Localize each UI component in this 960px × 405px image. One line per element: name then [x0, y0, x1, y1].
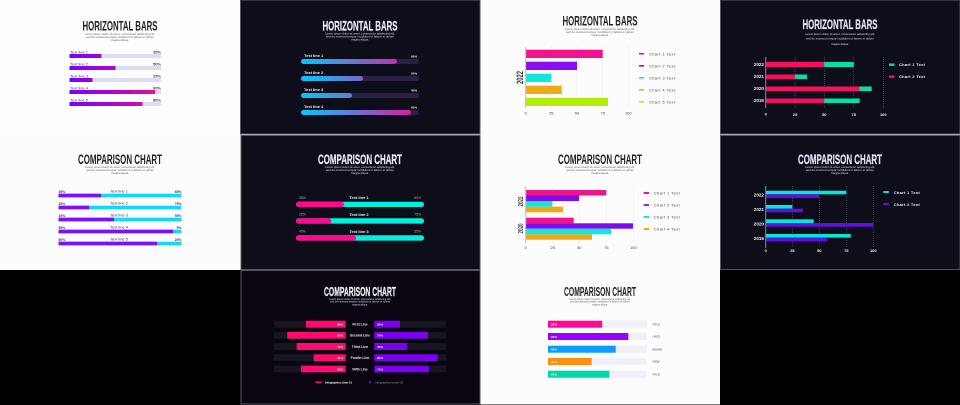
comparison row 1: 65% — [175, 190, 182, 194]
bar chart: 25 — [793, 112, 798, 117]
bar row 1 — [70, 50, 161, 58]
description: Lorem ipsum dolor sit amet, consectetur adipiscing elit, — [85, 33, 155, 36]
comparison row 4: Text line 4 — [110, 224, 129, 230]
bar row 5: 80% — [153, 98, 161, 102]
legend: Chart 1 Text — [654, 190, 681, 196]
progress row 4: VIEW — [652, 360, 660, 364]
comparison row 3: 45% — [299, 230, 306, 234]
bar row 5: Text line 5 — [70, 98, 89, 102]
comparison row 2 — [58, 200, 182, 209]
comparison row 2: 75% — [175, 202, 182, 206]
description: Lorem ipsum dolor sit amet, consectetur adipiscing elit, — [805, 33, 875, 36]
bar chart: 100 — [870, 248, 877, 253]
comparison row 3: 55% — [175, 214, 182, 218]
bar chart: 0 — [765, 112, 768, 116]
description: sed do eiusmod tempor incididunt ut labore et dolore — [86, 36, 155, 39]
description: Lorem ipsum dolor sit amet, consectetur adipiscing elit, — [565, 28, 635, 31]
progress row 5 — [548, 371, 660, 378]
progress row 3: 68% — [551, 348, 557, 352]
row 4: 45% — [337, 356, 343, 360]
bar chart: 50 — [575, 110, 580, 116]
legend: Chart 1 Text — [894, 190, 920, 195]
bar row 1 — [301, 53, 419, 64]
title: COMPARISON CHART — [318, 151, 402, 167]
title: COMPARISON CHART — [324, 285, 396, 299]
title: HORIZONTAL BARS — [802, 16, 878, 32]
progress row 2: LIKES — [652, 335, 660, 339]
bar chart: 2020 — [754, 86, 764, 91]
legend — [639, 52, 676, 104]
bar chart: 2020 — [518, 223, 525, 234]
progress row 3 — [548, 346, 662, 353]
comparison row 5 — [58, 236, 182, 245]
bar chart: 2022 — [518, 196, 525, 206]
comparison row 2: Text line 2 — [349, 212, 369, 217]
bar row 4: 90% — [153, 86, 161, 90]
title: HORIZONTAL BARS — [562, 13, 638, 29]
row 2: Second Line — [350, 334, 370, 338]
panel: stacked bars dark — [720, 0, 960, 134]
bar chart — [518, 186, 637, 250]
title: COMPARISON CHART — [558, 151, 642, 167]
bar chart — [754, 57, 887, 117]
row 2: 80% — [337, 334, 343, 338]
bar row 1: Text line 1 — [70, 50, 89, 54]
comparison row 2: Text line 2 — [110, 200, 129, 206]
description: Lorem ipsum dolor sit amet, consectetur adipiscing elit, — [805, 166, 875, 169]
comparison row 3: Text line 3 — [349, 229, 369, 234]
bar row 3: 45% — [411, 88, 417, 92]
row 2 — [274, 332, 446, 339]
title: HORIZONTAL BARS — [322, 18, 398, 34]
description: sed do eiusmod tempor incididunt ut labore et dolore — [570, 301, 631, 304]
description: magna aliqua. — [831, 172, 849, 175]
description — [325, 32, 395, 42]
description: magna aliqua. — [591, 172, 609, 175]
bar chart: 75 — [844, 248, 849, 253]
bar row 3 — [70, 74, 161, 82]
description: magna aliqua. — [351, 172, 369, 175]
legend: Chart 2 Text — [649, 64, 676, 68]
bar chart: 25 — [790, 248, 795, 253]
row 3: 70% — [337, 345, 343, 349]
comparison row 2: 25% — [58, 202, 65, 206]
panel: single-year bar chart light — [480, 0, 720, 135]
bar chart: 2022 — [754, 192, 764, 198]
bar row 2: 55% — [411, 72, 417, 76]
comparison row 3: 55% — [414, 230, 421, 234]
description — [565, 166, 635, 175]
bar row 3: 25% — [153, 74, 161, 78]
bar chart: 2019 — [754, 98, 764, 103]
panel: horizontal bars light — [0, 0, 240, 135]
progress row 5: TITLE — [652, 372, 660, 376]
panel: grouped bars dark — [720, 136, 960, 270]
comparison row 1: 35% — [58, 190, 65, 194]
panel: colored progress bars light — [480, 270, 720, 404]
bar chart: 50 — [822, 112, 827, 117]
description — [565, 28, 635, 37]
bar row 1: 80% — [411, 54, 417, 58]
bar chart: 75 — [600, 110, 606, 116]
bar chart: 2022 — [515, 71, 525, 84]
description: sed do eiusmod tempor incididunt ut labore et dolore — [330, 301, 391, 304]
bar chart: 0 — [525, 110, 528, 116]
description: Lorem ipsum dolor sit amet, consectetur adipiscing elit, — [85, 166, 155, 169]
row 1: First Line — [352, 322, 368, 326]
description — [329, 298, 391, 306]
title: COMPARISON CHART — [564, 285, 636, 299]
row 1: 35% — [377, 322, 383, 326]
description: magna aliqua. — [111, 172, 129, 175]
row 3: Third Line — [352, 345, 368, 349]
legend — [315, 380, 403, 384]
legend: Infographics chart 02 — [375, 380, 403, 384]
row 5 — [274, 366, 446, 372]
description — [325, 166, 395, 175]
row 2: 75% — [377, 334, 383, 338]
description: magna aliqua. — [111, 39, 129, 42]
panel: butterfly comparison dark — [241, 270, 480, 404]
bar chart: 2019 — [754, 236, 764, 241]
panel: grouped bar chart light — [480, 136, 720, 270]
comparison row 3: 45% — [58, 214, 65, 218]
bar chart: 25 — [550, 245, 556, 250]
description — [85, 166, 155, 175]
row 4 — [274, 354, 446, 361]
bar chart: 2021 — [754, 74, 764, 79]
bar chart: 75 — [851, 112, 857, 117]
legend: Chart 4 Text — [654, 226, 681, 232]
comparison row 3 — [296, 229, 424, 241]
progress row 2: 80% — [551, 335, 557, 339]
description: sed do eiusmod tempor incididunt ut labore et dolore — [566, 169, 635, 172]
description: Lorem ipsum dolor sit amet, consectetur adipiscing elit, — [569, 298, 631, 301]
comparison row 1 — [58, 188, 182, 197]
row 1 — [274, 321, 446, 328]
bar row 2: 50% — [153, 62, 161, 66]
title: HORIZONTAL BARS — [82, 18, 158, 34]
bar chart: 2020 — [754, 222, 764, 226]
bar chart — [754, 186, 877, 253]
bar chart: 75 — [604, 245, 609, 250]
description: sed do eiusmod tempor incididunt ut labore et dolore — [566, 31, 635, 34]
comparison row 3: Text line 3 — [110, 212, 129, 218]
bar row 5 — [70, 98, 161, 106]
comparison row 1: Text line 1 — [349, 195, 369, 200]
row 5: 62% — [337, 367, 343, 371]
legend: Chart 3 Text — [649, 76, 676, 80]
row 4: 88% — [377, 356, 383, 360]
comparison row 1: 65% — [414, 196, 421, 200]
legend: Chart 5 Text — [649, 100, 676, 104]
bar chart: 25 — [549, 110, 554, 116]
description — [85, 33, 155, 42]
bar chart: 2022 — [754, 62, 764, 67]
row 4: Fourth Line — [351, 356, 369, 360]
description: magna aliqua. — [351, 38, 369, 42]
bar row 2: Text line 2 — [304, 70, 324, 75]
legend: Chart 3 Text — [654, 214, 681, 220]
bar chart: 50 — [817, 248, 822, 253]
description: Lorem ipsum dolor sit amet, consectetur adipiscing elit, — [325, 32, 395, 36]
bar chart: 100 — [630, 245, 637, 250]
legend: Infographics chart 01 — [325, 380, 352, 384]
bar row 1: Text line 1 — [304, 53, 324, 58]
legend: Chart 2 Text — [654, 202, 681, 208]
comparison row 1 — [296, 195, 424, 207]
panel: horizontal bars dark gradient — [240, 0, 480, 134]
bar row 2 — [70, 62, 161, 70]
row 3 — [274, 343, 446, 350]
legend: Chart 1 Text — [899, 62, 926, 67]
comparison row 4 — [58, 224, 182, 233]
legend — [644, 190, 681, 232]
legend — [889, 62, 926, 79]
comparison row 4: 95% — [58, 226, 65, 230]
description: magna aliqua. — [352, 303, 368, 306]
title: COMPARISON CHART — [798, 151, 882, 167]
legend: Chart 4 Text — [649, 88, 676, 92]
bar chart: 0 — [765, 248, 768, 253]
progress row 4: 45% — [551, 360, 557, 364]
description: sed do eiusmod tempor incididunt ut labore et dolore — [326, 169, 395, 172]
bar row 4 — [70, 86, 161, 94]
description: magna aliqua. — [831, 43, 849, 46]
bar row 2: Text line 2 — [70, 62, 89, 66]
description: sed do eiusmod tempor incididunt ut labore et dolore — [86, 169, 155, 172]
bar row 4: Text line 4 — [70, 86, 89, 90]
progress row 2 — [548, 333, 660, 340]
bar row 3: Text line 3 — [304, 87, 324, 92]
comparison row 2 — [296, 212, 424, 224]
bar chart: 100 — [625, 110, 632, 116]
description: Lorem ipsum dolor sit amet, consectetur adipiscing elit, — [565, 166, 635, 169]
bar row 3 — [301, 87, 419, 98]
progress row 1: TITLE — [652, 322, 660, 326]
description: Lorem ipsum dolor sit amet, consectetur adipiscing elit, — [325, 166, 395, 169]
bar chart: 0 — [525, 245, 528, 250]
progress row 3: SHARE — [652, 347, 662, 351]
description: magna aliqua. — [591, 34, 609, 37]
comparison row 5: 20% — [175, 238, 182, 242]
row 1: 55% — [337, 322, 343, 326]
row 5: 75% — [377, 367, 383, 371]
progress row 4 — [548, 358, 660, 365]
comparison row 2: 75% — [414, 212, 421, 216]
description: Lorem ipsum dolor sit amet, consectetur adipiscing elit, — [329, 298, 391, 301]
panel: comparison chart dark rounded — [241, 136, 480, 270]
title: COMPARISON CHART — [78, 151, 162, 167]
comparison row 4: 5% — [177, 226, 182, 230]
bar row 2 — [301, 70, 419, 81]
panel: comparison chart light — [0, 136, 240, 270]
comparison row 1: 35% — [299, 196, 306, 200]
description — [805, 166, 875, 175]
bar chart: 100 — [880, 112, 887, 117]
description: sed do eiusmod tempor incididunt ut labore et dolore — [806, 169, 875, 172]
legend — [883, 190, 920, 207]
description — [569, 298, 631, 306]
bar row 1: 35% — [153, 50, 161, 54]
progress row 1: 55% — [551, 322, 557, 326]
legend: Chart 1 Text — [649, 52, 676, 56]
bar row 3: Text line 3 — [70, 74, 89, 78]
comparison row 3 — [58, 212, 182, 221]
bar chart: 50 — [577, 245, 582, 250]
legend: Chart 2 Text — [899, 74, 926, 79]
comparison row 5: Text line 5 — [110, 236, 129, 242]
progress row 5: 62% — [551, 372, 557, 376]
description: sed do eiusmod tempor incididunt ut labore et dolore — [326, 36, 395, 38]
comparison row 2: 25% — [299, 212, 306, 216]
comparison row 1: Text line 1 — [110, 188, 129, 194]
bar row 4: 93% — [411, 106, 417, 110]
bar chart — [515, 47, 632, 116]
row 3: 45% — [377, 345, 383, 349]
bar row 4: Text line 4 — [304, 104, 324, 109]
progress row 1 — [548, 321, 660, 328]
description: sed do eiusmod tempor incididunt ut labore et dolore — [806, 38, 875, 40]
bar chart: 2021 — [754, 207, 764, 212]
description — [805, 33, 875, 46]
legend: Chart 2 Text — [894, 202, 920, 207]
row 5: Fifth Line — [352, 367, 368, 371]
bar row 4 — [301, 104, 419, 115]
comparison row 5: 80% — [58, 238, 65, 242]
description: magna aliqua. — [592, 303, 608, 306]
